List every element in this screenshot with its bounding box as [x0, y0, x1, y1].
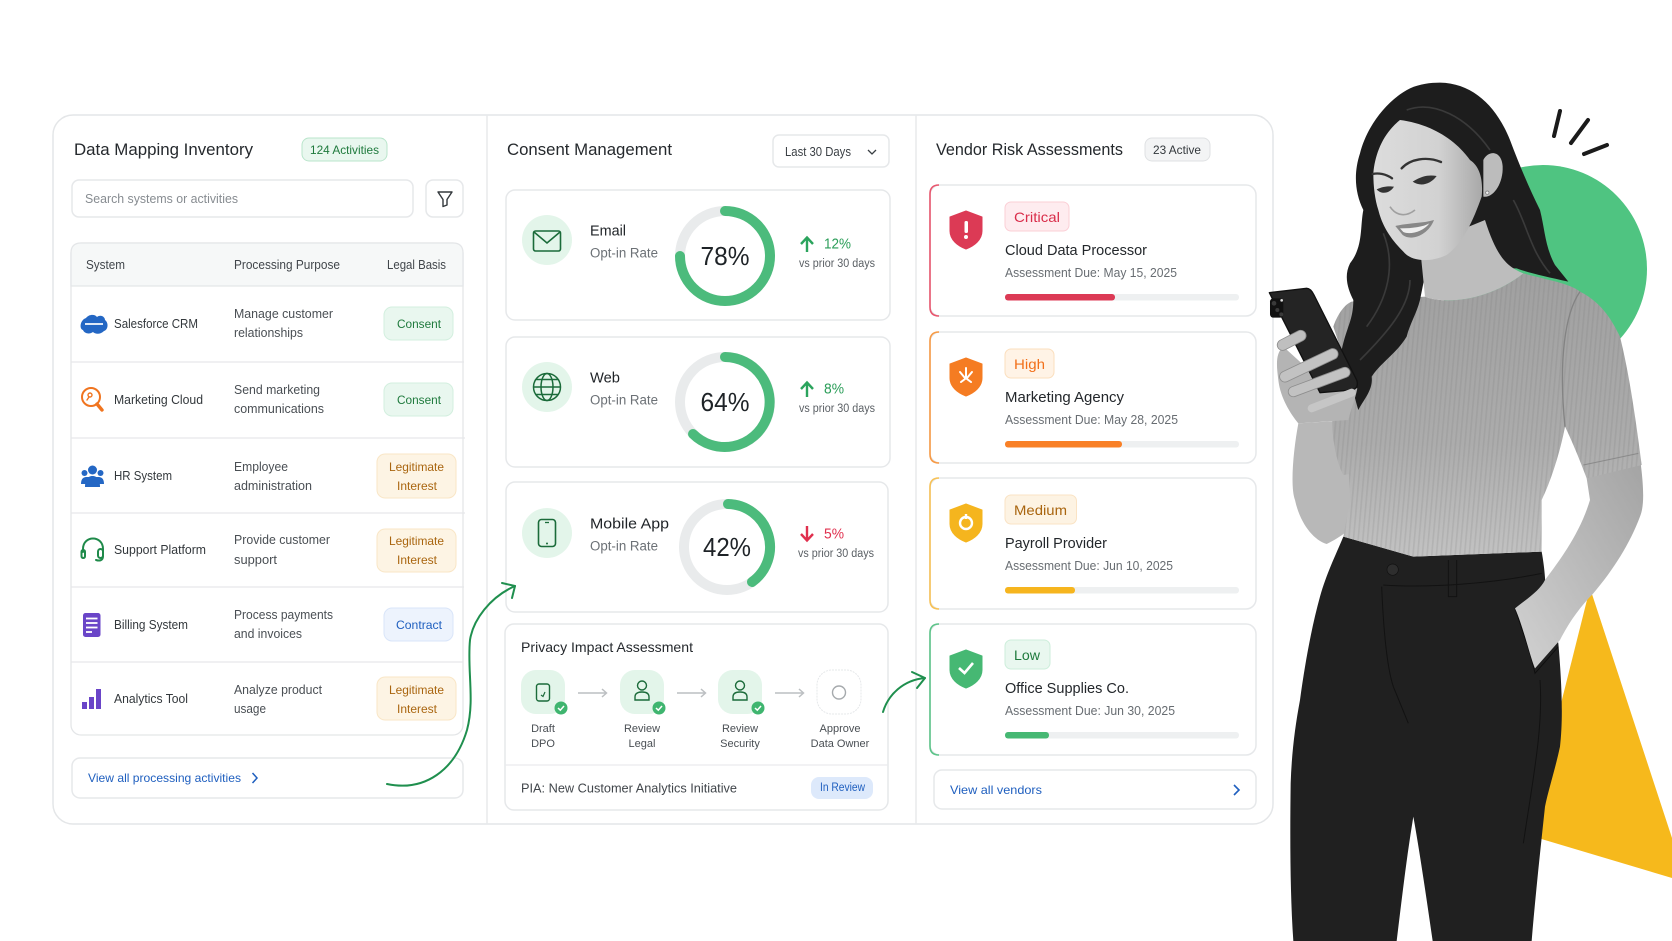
- row: hr system: administration: [234, 479, 312, 493]
- row: salesforce crm: Manage customer: [234, 307, 333, 321]
- row: marketing cloud: Consent: [397, 393, 442, 407]
- ribbed t-shirt: [1332, 273, 1642, 557]
- donut: 42 percent: [684, 504, 770, 590]
- card: critical vendor: Assessment Due: May 15, 2025: [1005, 266, 1177, 280]
- row: salesforce crm: Salesforce CRM: [114, 317, 198, 331]
- step: review legal: Legal: [629, 738, 655, 750]
- table header: [86, 258, 446, 272]
- card: low vendor: Low: [1014, 647, 1041, 663]
- card: medium vendor: Assessment Due: Jun 10, 2025: [1005, 559, 1173, 573]
- icon: billing document: [83, 613, 100, 637]
- table: inventory: [71, 243, 465, 735]
- step: approve data owner: Data Owner: [811, 738, 870, 750]
- row: billing system: Process payments: [234, 608, 333, 622]
- card: email opt-in: Email: [590, 222, 626, 240]
- table header: System: [86, 258, 125, 272]
- link: view all vendors: [934, 770, 1256, 809]
- step: review legal: [620, 670, 666, 750]
- icon: attention ticks: [1554, 111, 1607, 154]
- right arm: [1515, 447, 1643, 668]
- row: hr system: Legitimate: [389, 460, 444, 474]
- fingers: [1283, 336, 1352, 408]
- icon: low shield: [950, 650, 982, 688]
- donut: 64 percent: 64%: [700, 387, 750, 417]
- step: draft dpo: DPO: [531, 738, 555, 750]
- row: analytics tool: usage: [234, 702, 266, 716]
- background: green circle: [1439, 165, 1647, 373]
- card: critical vendor: Critical: [1014, 209, 1060, 225]
- row: hr system: Interest: [397, 479, 438, 493]
- trend: up 8 percent: vs prior 30 days: [799, 403, 875, 415]
- background: yellow triangle: [1528, 588, 1672, 878]
- link: view all processing activities: [72, 758, 463, 798]
- row: analytics tool: Analytics Tool: [114, 692, 188, 706]
- icon: phone: [522, 508, 572, 558]
- row: support platform: Provide customer: [234, 533, 330, 547]
- table header: Processing Purpose: [234, 258, 340, 272]
- step: approve data owner: [811, 670, 870, 750]
- search box: [72, 180, 413, 217]
- row: analytics tool: Analyze product: [234, 683, 323, 697]
- heading: data mapping inventory: Data Mapping Inventory: [74, 141, 254, 159]
- icon: high shield: [950, 358, 982, 396]
- step: review security: [718, 670, 764, 750]
- icon: critical shield: [950, 211, 982, 249]
- arrow: draft to legal: [578, 689, 606, 697]
- arrow: inventory to mobile app: [387, 583, 515, 786]
- step: draft dpo: Draft: [531, 723, 555, 735]
- panel: vendor risk assessments: [930, 138, 1256, 809]
- icon: medium shield: [950, 504, 982, 542]
- badge: 124 activities: 124 Activities: [310, 143, 379, 157]
- dropdown: last 30 days: Last 30 Days: [785, 145, 851, 159]
- step: review security: Security: [720, 738, 760, 750]
- card: email opt-in: Opt-in Rate: [590, 246, 658, 260]
- trend: down 5 percent: vs prior 30 days: [798, 548, 874, 560]
- card: medium vendor: Medium: [1014, 502, 1067, 518]
- icon: envelope: [522, 215, 572, 265]
- card: web opt-in: [506, 337, 890, 467]
- row: marketing cloud: Send marketing: [234, 383, 320, 397]
- icon: headset: [82, 538, 103, 561]
- card: medium vendor: Payroll Provider: [1005, 536, 1107, 552]
- row: billing system: and invoices: [234, 627, 302, 641]
- row: support platform: Support Platform: [114, 543, 206, 557]
- dropdown: last 30 days: [773, 135, 889, 167]
- pia name and status: In Review: [820, 782, 866, 794]
- step: review security: Review: [722, 723, 758, 735]
- donut: 64 percent: [680, 357, 770, 447]
- row: billing system: [83, 608, 453, 641]
- dashboard panel: [53, 115, 1273, 824]
- card: low vendor: [930, 624, 1256, 755]
- row: marketing cloud: communications: [234, 402, 324, 416]
- row: support platform: Legitimate: [389, 534, 444, 548]
- link: view all processing activities: View all processing activities: [88, 771, 241, 785]
- card: web opt-in: Web: [590, 370, 620, 386]
- neck: [1420, 220, 1523, 300]
- filter button: [426, 180, 463, 217]
- card: high vendor: High: [1014, 356, 1045, 372]
- icon: people group: [81, 466, 104, 487]
- trend: up 12 percent: 12%: [824, 236, 851, 252]
- card: critical vendor: [930, 185, 1256, 316]
- row: marketing cloud: Marketing Cloud: [114, 393, 203, 407]
- card: high vendor: Marketing Agency: [1005, 390, 1125, 406]
- card: low vendor: Office Supplies Co.: [1005, 681, 1129, 697]
- badge: 23 active: [1145, 138, 1210, 161]
- badge: 23 active: 23 Active: [1153, 143, 1201, 157]
- donut: 42 percent: 42%: [703, 532, 751, 562]
- step: review legal: Review: [624, 723, 660, 735]
- card: privacy impact assessment: Privacy Impact Assessment: [521, 639, 693, 655]
- row: billing system: Billing System: [114, 618, 188, 632]
- row: marketing cloud: [82, 383, 453, 416]
- row: hr system: [81, 454, 456, 498]
- left forearm: [1293, 420, 1353, 544]
- arrow: security to approve: [775, 689, 804, 697]
- smartphone: [1269, 288, 1357, 393]
- card: medium vendor: [930, 478, 1256, 609]
- row: hr system: Employee: [234, 460, 288, 474]
- arrow: legal to security: [677, 689, 706, 697]
- row: analytics tool: Interest: [397, 702, 438, 716]
- trend: up 12 percent: [799, 236, 875, 270]
- card: critical vendor: Cloud Data Processor: [1005, 243, 1147, 259]
- card: privacy impact assessment: [505, 624, 888, 810]
- card: mobile app opt-in: Mobile App: [590, 516, 669, 532]
- row: hr system: HR System: [114, 469, 172, 483]
- table header: Legal Basis: [387, 258, 446, 272]
- search box: Search systems or activities: [85, 192, 238, 206]
- trend: up 8 percent: 8%: [824, 380, 844, 398]
- arrow: pia to low risk vendor: [883, 672, 925, 712]
- row: billing system: Contract: [396, 618, 443, 632]
- trend: up 8 percent: [799, 380, 875, 415]
- left hand palm: [1277, 347, 1357, 423]
- face: [1373, 120, 1503, 260]
- card: high vendor: Assessment Due: May 28, 2025: [1005, 413, 1178, 427]
- row: analytics tool: [82, 677, 456, 720]
- card: high vendor: [930, 332, 1256, 463]
- icon: orange magnifier: [82, 388, 102, 410]
- row: salesforce crm: Consent: [397, 317, 442, 331]
- card: low vendor: Assessment Due: Jun 30, 2025: [1005, 704, 1175, 718]
- icon: globe: [522, 362, 572, 412]
- pia name and status: PIA: New Customer Analytics Initiative: [521, 780, 737, 796]
- heading: vendor risk assessments: Vendor Risk Assessments: [936, 141, 1123, 159]
- card: mobile app opt-in: Opt-in Rate: [590, 538, 658, 554]
- heading: consent management: Consent Management: [507, 141, 672, 159]
- pia name and status: [521, 777, 873, 799]
- person holding a phone: [1269, 83, 1643, 941]
- icon: bar chart: [82, 689, 101, 709]
- row: salesforce crm: [81, 307, 453, 340]
- step: approve data owner: Approve: [820, 723, 860, 735]
- badge: 124 activities: [302, 138, 387, 161]
- trend: down 5 percent: [798, 526, 874, 560]
- trousers: [1290, 537, 1562, 941]
- panel: consent management: [505, 135, 890, 810]
- donut: 78 percent: 78%: [700, 241, 750, 271]
- row: support platform: support: [234, 553, 278, 567]
- row: analytics tool: Legitimate: [389, 683, 444, 697]
- row: salesforce crm: relationships: [234, 326, 303, 340]
- card: mobile app opt-in: [506, 482, 888, 612]
- trend: up 12 percent: vs prior 30 days: [799, 258, 875, 270]
- step: draft dpo: [521, 670, 568, 750]
- hair: [1342, 83, 1568, 410]
- card: email opt-in: [506, 190, 890, 320]
- donut: 78 percent: [680, 211, 770, 301]
- link: view all vendors: View all vendors: [950, 783, 1042, 797]
- trend: down 5 percent: 5%: [824, 526, 844, 542]
- row: support platform: [82, 529, 456, 572]
- panel: data mapping inventory: [71, 138, 465, 798]
- icon: salesforce cloud: [81, 315, 108, 334]
- row: support platform: Interest: [397, 553, 438, 567]
- card: web opt-in: Opt-in Rate: [590, 392, 658, 408]
